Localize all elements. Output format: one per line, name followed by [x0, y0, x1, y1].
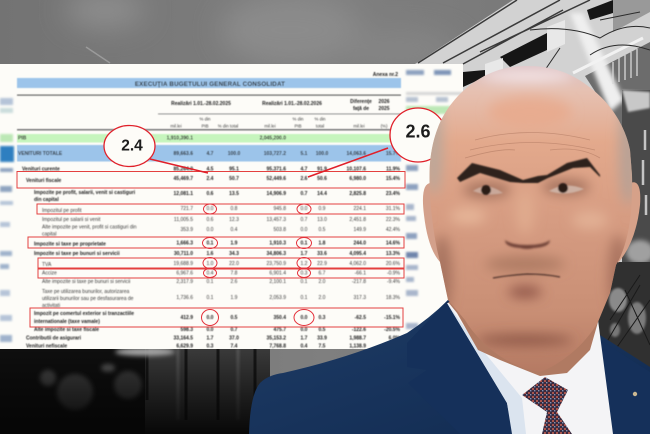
red highlight boxes	[17, 172, 405, 327]
row: Taxe pe utilizarea bunurilor: 1,736.6	[176, 295, 193, 301]
row: TVA: 19,688.9	[174, 261, 193, 267]
row: PIB: 2,045,200.0	[260, 136, 286, 142]
column headers: % din	[315, 116, 326, 122]
row: Impozite si taxe pe bunuri si servicii	[34, 251, 401, 257]
row: Accize	[42, 270, 401, 276]
row: Impozit pe comertul exterior: -62.5	[355, 315, 366, 321]
row: Accize: 6,967.6	[176, 270, 193, 276]
annex label: Anexa nr.2	[373, 72, 398, 78]
row: Venituri nefiscale: 17.2%	[386, 344, 401, 350]
row: Venituri curente: 95,371.6	[267, 166, 286, 172]
row: Impozite pe profit, salarii: 14,906.9	[267, 191, 286, 197]
row: Accize: 6,901.4	[269, 270, 286, 276]
row: Contributii de asigurari: 1,988.7	[349, 336, 366, 342]
row: Impozitul pe profit: 721.7	[180, 206, 193, 212]
row: Impozite si taxe pe proprietate: 1.9	[231, 240, 238, 246]
row: TVA: 22.0	[229, 261, 239, 267]
callout: 2.6	[308, 108, 446, 177]
row: Alte impozite pe bunuri: 2,100.1	[269, 279, 286, 285]
row: Venituri fiscale: 52,449.6	[267, 176, 286, 182]
row: Venituri fiscale: Venituri fiscale	[26, 178, 62, 184]
column headers: PIB	[294, 124, 302, 128]
row: Impozite pe profit, salarii: 14.4	[317, 191, 327, 197]
row: Impozit pe comertul exterior: 0.0	[207, 315, 214, 321]
row: Accize: -66.1	[355, 270, 366, 276]
neck	[448, 300, 598, 376]
row: Venituri nefiscale: 6,629.9	[176, 344, 193, 350]
row: Impozitul pe profit: 945.8	[273, 206, 286, 212]
column headers: (%)	[381, 124, 388, 128]
row: Taxe pe utilizarea bunurilor: 1.9	[231, 295, 238, 301]
row: Venituri fiscale: 45,469.7	[174, 176, 193, 182]
row: Accize: Accize	[42, 270, 57, 276]
row: Contributii de asigurari: Contributii de asigurari	[26, 336, 82, 342]
row: Taxe pe utilizarea bunurilor: activitati	[42, 303, 60, 309]
row: Contributii de asigurari: 33.9	[317, 336, 327, 342]
column headers: Realizări 1.01.-28.02.2026	[262, 101, 322, 107]
row: Contributii de asigurari: 1.7	[301, 336, 308, 342]
row: TVA: 22.9	[317, 261, 327, 267]
row: Alte impozite pe bunuri: 2.0	[319, 279, 326, 285]
column headers: mil.lei	[170, 124, 182, 128]
row: Impozite si taxe pe bunuri si servicii: 4,095.4	[349, 251, 366, 257]
row: Alte impozite pe venit: 0.0	[207, 227, 214, 233]
row: Venituri nefiscale: 1,138.9	[349, 344, 366, 350]
row: Taxe pe utilizarea bunurilor: 2,053.9	[269, 295, 286, 301]
column headers	[170, 99, 390, 128]
row: Venituri curente: 95.1	[229, 166, 239, 172]
row: Impozite pe profit, salarii: 2,825.8	[349, 191, 366, 197]
row: Venituri fiscale	[26, 176, 401, 184]
column headers: total	[316, 124, 324, 128]
row: Venituri nefiscale: 7,768.8	[269, 344, 286, 350]
row: Contributii de asigurari: 1.7	[207, 336, 214, 342]
red circles around values	[202, 204, 314, 326]
row: Venituri nefiscale: Venituri nefiscale	[26, 344, 67, 350]
row: Alte impozite si taxe fiscale: 0.5	[319, 327, 326, 333]
row: Impozitul pe profit: 0.0	[207, 206, 214, 212]
column headers: faţă de	[353, 106, 369, 112]
row: Venituri totale: 100.0	[316, 151, 328, 157]
row: Alte impozite si taxe fiscale: 0.0	[301, 327, 308, 333]
row: Venituri nefiscale: 7.4	[231, 344, 238, 350]
document sheet	[0, 64, 463, 349]
callout: 2.4	[104, 126, 208, 173]
background: concrete building	[415, 0, 650, 275]
row: Impozite pe profit, salarii: 23.4%	[386, 191, 401, 197]
row: Venituri totale: 4.7	[207, 151, 214, 157]
row: Venituri curente: 11.9%	[386, 166, 401, 172]
row: Impozite si taxe pe proprietate: 14.6%	[386, 240, 401, 246]
row: TVA: 4,062.0	[349, 261, 366, 267]
row: Venituri totale: 89,663.6	[174, 151, 193, 157]
row: Alte impozite pe bunuri: -9.4%	[387, 279, 401, 285]
row: Venituri totale: 15.7%	[386, 151, 401, 157]
row: Alte impozite pe bunuri: 0.1	[301, 279, 308, 285]
row: Impozite pe profit, salarii	[34, 190, 401, 203]
callout: 2.4: 2.4	[121, 138, 143, 154]
portrait of a man in a navy suit	[249, 66, 650, 434]
row: Venituri nefiscale	[26, 344, 401, 350]
row: Contributii de asigurari: 33,164.5	[174, 336, 193, 342]
necktie	[522, 377, 572, 434]
row: Contributii de asigurari: 37.0	[229, 336, 239, 342]
column headers: mil.lei	[264, 124, 276, 128]
row: Venituri curente	[22, 166, 401, 172]
row: Impozit pe comertul exterior: 0.0	[301, 315, 308, 321]
eyebrows	[457, 158, 600, 183]
row: Alte impozite pe venit: 353.9	[180, 227, 193, 233]
row: Alte impozite si taxe fiscale: 598.3	[180, 327, 193, 333]
row: Venituri fiscale: 2.6	[301, 176, 308, 182]
row: Impozite si taxe pe proprietate: Impozite si taxe pe proprietate	[34, 242, 106, 248]
row: Venituri fiscale: 50.7	[229, 176, 239, 182]
row: Alte impozite pe venit	[42, 224, 401, 238]
row: TVA: 1.2	[301, 261, 308, 267]
row: Impozite si taxe pe proprietate: 244.0	[353, 240, 366, 246]
row: Venituri fiscale: 50.6	[317, 176, 327, 182]
jacket lapels	[407, 300, 650, 434]
row: Impozit pe comertul exterior: -15.1%	[384, 315, 401, 321]
row: Impozit pe comertul exterior: 0.3	[319, 315, 326, 321]
forehead wrinkles	[465, 132, 600, 158]
column headers: Diferenţe	[350, 99, 372, 105]
row: Impozitul pe salarii	[42, 217, 401, 223]
row: Alte impozite pe bunuri: Alte impozite si taxe pe bunuri si servicii	[42, 279, 130, 285]
eyes	[473, 183, 584, 195]
row: Impozite pe profit, salarii: 0.7	[301, 191, 308, 197]
row: Impozite si taxe pe bunuri si servicii: 13.3%	[386, 251, 401, 257]
row: Impozitul pe profit: Impozitul pe profit	[42, 208, 82, 214]
row: Venituri nefiscale: 0.4	[301, 344, 308, 350]
row: Impozitul pe profit: 0.9	[319, 206, 326, 212]
row: Impozite si taxe pe bunuri si servicii: 34,806.3	[267, 251, 286, 257]
suit jacket	[249, 300, 650, 434]
row: Accize: 6.7	[319, 270, 326, 276]
row: Alte impozite pe venit: 0.4	[231, 227, 238, 233]
row: Venituri totale: 100.0	[228, 151, 240, 157]
column headers: % din	[200, 116, 211, 122]
row: Venituri curente: 4.5	[207, 166, 214, 172]
callout: 2.6: 2.6	[405, 122, 431, 142]
row: Impozite pe profit, salarii: 13.5	[229, 191, 239, 197]
row: Impozite si taxe pe proprietate: 0.1	[301, 240, 308, 246]
row: Alte impozite si taxe fiscale: 0.0	[207, 327, 214, 333]
row: Accize: 0.4	[207, 270, 214, 276]
row: Impozite pe profit, salarii: 12,081.1	[174, 191, 193, 197]
row: Impozite si taxe pe bunuri si servicii: 33.6	[317, 251, 327, 257]
row: Alte impozite si taxe fiscale: -122.6	[352, 327, 366, 333]
row: Alte impozite pe venit: 503.8	[273, 227, 286, 233]
row: Alte impozite pe venit: 42.4%	[386, 227, 401, 233]
row: Contributii de asigurari: 35,153.2	[267, 336, 286, 342]
row: Venituri curente: Venituri curente	[22, 166, 60, 172]
row: Alte impozite pe venit: 0.0	[301, 227, 308, 233]
row: Alte impozite si taxe fiscale: 475.7	[273, 327, 286, 333]
row: TVA: 23,750.9	[267, 261, 286, 267]
blurred sheet edge: right	[406, 70, 466, 329]
row: Impozite si taxe pe bunuri si servicii: 1.7	[301, 251, 308, 257]
row: Impozitul pe salarii: 13.0	[317, 217, 327, 223]
lapel pin	[633, 392, 637, 396]
row: Impozit pe comertul exterior: 412.9	[180, 315, 193, 321]
row: Impozitul pe profit: 0.0	[301, 206, 308, 212]
row: Alte impozite pe bunuri: 2.6	[231, 279, 238, 285]
row: Alte impozite si taxe fiscale	[34, 327, 401, 333]
row: Impozitul pe salarii: 13,457.3	[267, 217, 286, 223]
row: Taxe pe utilizarea bunurilor: 0.1	[301, 295, 308, 301]
row: Impozite si taxe pe bunuri si servicii: Impozite si taxe pe bunuri si servicii	[34, 251, 120, 257]
row: Accize: 7.8	[231, 270, 238, 276]
row: Impozite si taxe pe proprietate: 0.1	[207, 240, 214, 246]
row: Impozit pe comertul exterior: internationale (taxe vamale)	[34, 319, 100, 325]
row: Taxe pe utilizarea bunurilor: Taxe pe utilizarea bunurilor, autorizarea	[42, 289, 129, 295]
row: Impozitul pe profit: 224.1	[353, 206, 366, 212]
column headers: 2026	[378, 99, 390, 105]
row: Venituri curente: 10,107.6	[347, 166, 366, 172]
row: Alte impozite pe bunuri: 2,317.9	[176, 279, 193, 285]
row: Taxe pe utilizarea bunurilor: 18.3%	[386, 295, 401, 301]
row: Impozitul pe salarii: 0.7	[301, 217, 308, 223]
row: Accize: -0.9%	[387, 270, 401, 276]
row: Impozite si taxe pe proprietate	[34, 240, 401, 248]
row: Impozit pe comertul exterior: Impozit pe comertul exterior si tranzactiile	[34, 311, 134, 317]
row: Alte impozite si taxe fiscale: -20.5%	[384, 327, 401, 333]
row: Impozite si taxe pe proprietate: 1,910.3	[269, 240, 286, 246]
row: Impozite si taxe pe proprietate: 1,666.3	[176, 240, 193, 246]
row: Impozite si taxe pe bunuri si servicii: 30,711.0	[174, 251, 193, 257]
row: Impozite si taxe pe bunuri si servicii: 34.3	[229, 251, 239, 257]
row: Taxe pe utilizarea bunurilor	[42, 289, 401, 309]
row: Alte impozite pe venit: capital	[42, 232, 56, 238]
head	[425, 66, 637, 372]
row: Alte impozite pe venit: 0.5	[319, 227, 326, 233]
table title bar	[17, 78, 401, 88]
shirt collar	[447, 300, 613, 434]
mouth	[493, 274, 560, 278]
row: Alte impozite pe venit: 149.9	[353, 227, 366, 233]
row: Venituri nefiscale: 0.3	[207, 344, 214, 350]
row: TVA	[42, 261, 401, 268]
blurred sheet edge: left	[0, 98, 14, 342]
row: Venituri totale	[17, 145, 401, 162]
row: Impozit pe comertul exterior	[34, 311, 401, 325]
table title bar: EXECUŢIA BUGETULUI GENERAL CONSOLIDAT	[135, 81, 285, 88]
row: Impozitul pe salarii: 22.3%	[386, 217, 401, 223]
row: PIB	[17, 134, 401, 142]
row: Impozitul pe profit: 0.8	[231, 206, 238, 212]
row: Venituri totale: 103,727.2	[264, 151, 286, 157]
row: Alte impozite pe bunuri: 0.1	[207, 279, 214, 285]
row: Venituri nefiscale: 7.5	[319, 344, 326, 350]
row: Venituri fiscale: 15.4%	[386, 176, 401, 182]
row: Impozite pe profit, salarii: Impozite pe profit, salarii, venit si castiguri	[34, 190, 136, 196]
row: TVA: 20.6%	[386, 261, 401, 267]
row: Impozite si taxe pe proprietate: 1.8	[319, 240, 326, 246]
row: Alte impozite pe bunuri: -217.8	[352, 279, 366, 285]
row: Taxe pe utilizarea bunurilor: 0.1	[207, 295, 214, 301]
row: Venituri curente: 4.7	[301, 166, 308, 172]
column headers: mil.lei	[353, 124, 365, 128]
row: TVA: TVA	[42, 262, 52, 268]
row: Impozitul pe salarii: Impozitul pe salarii si venit	[42, 217, 101, 223]
nose	[505, 240, 550, 249]
row: Impozitul pe salarii: 11,005.5	[174, 217, 193, 223]
row: Impozitul pe profit: 31.1%	[386, 206, 401, 212]
column headers: PIB	[201, 124, 209, 128]
budget table	[17, 72, 401, 350]
row: Alte impozite pe bunuri	[42, 279, 401, 285]
row: Impozitul pe salarii: 0.6	[207, 217, 214, 223]
row: TVA: 1.0	[207, 261, 214, 267]
row: Taxe pe utilizarea bunurilor: utilizarii bunurilor sau pe desfasurarea de	[42, 296, 134, 302]
row: PIB: 1,910,390.1	[167, 136, 193, 142]
row: Venituri totale: 14,063.6	[347, 151, 366, 157]
row: Alte impozite pe venit: Alte impozite pe venit, profit si castiguri din	[42, 224, 137, 230]
background: dark lower band	[0, 262, 650, 434]
row: Venituri totale: VENITURI TOTALE	[18, 151, 63, 157]
row: PIB: PIB	[18, 136, 27, 142]
column headers: % din total	[218, 124, 238, 128]
row: Impozite si taxe pe bunuri si servicii: 1.6	[207, 251, 214, 257]
row: Impozit pe comertul exterior: 0.5	[231, 315, 238, 321]
row: Venituri fiscale: 2.4	[207, 176, 214, 182]
row: Venituri curente: 85,264.0	[174, 166, 193, 172]
row: Impozitul pe salarii: 2,451.8	[349, 217, 366, 223]
row: Venituri totale: 5.1	[301, 151, 308, 157]
column headers: % din	[293, 116, 304, 122]
row: Impozit pe comertul exterior: 350.4	[273, 315, 286, 321]
row: Contributii de asigurari	[26, 336, 401, 342]
ears	[423, 182, 640, 263]
row: Venituri fiscale: 6,980.0	[349, 176, 366, 182]
row: Alte impozite si taxe fiscale: Alte impozite si taxe fiscale	[34, 327, 99, 333]
row: Taxe pe utilizarea bunurilor: 317.3	[353, 295, 366, 301]
row: Alte impozite si taxe fiscale: 0.7	[231, 327, 238, 333]
column headers: Realizări 1.01.-28.02.2025	[171, 101, 231, 107]
row: Impozite pe profit, salarii: 0.6	[207, 191, 214, 197]
row: Accize: 0.3	[301, 270, 308, 276]
column headers: 2025	[378, 106, 390, 112]
row: Impozite pe profit, salarii: din capital	[34, 197, 59, 203]
row: Venituri curente: 91.9	[317, 166, 327, 172]
row: Impozitul pe salarii: 12.3	[229, 217, 239, 223]
row: Contributii de asigurari: 6.0%	[389, 336, 401, 342]
row: Taxe pe utilizarea bunurilor: 2.0	[319, 295, 326, 301]
row: Impozitul pe profit	[42, 206, 401, 214]
